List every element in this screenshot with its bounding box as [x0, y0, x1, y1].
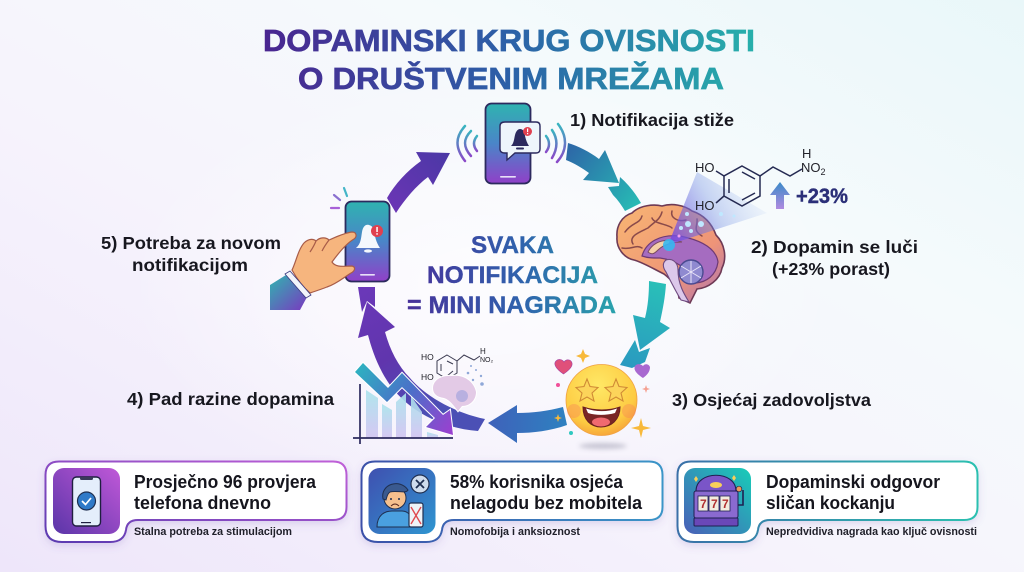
hand — [292, 232, 356, 293]
icon: bell — [356, 225, 380, 248]
icon tile: slot machine: 7 — [711, 497, 718, 511]
dopamine molecule with increase: HO — [695, 198, 714, 213]
top phone with notification — [458, 104, 565, 184]
cerebrum — [617, 205, 725, 303]
dopamine burst beam — [663, 172, 767, 251]
dopamine molecule with increase: HO — [695, 160, 714, 175]
dopamine molecule with increase: NO — [801, 160, 820, 175]
center message — [407, 232, 616, 319]
brainstem — [663, 259, 689, 302]
icon tile: slot machine — [684, 468, 751, 534]
step 4 label: 4) Pad razine dopamina — [127, 389, 334, 409]
card headline: Prosječno 96 provjera — [134, 472, 317, 492]
corpus callosum — [648, 240, 682, 254]
step 5 label: notifikacijom — [132, 255, 248, 275]
emoji face — [566, 364, 637, 436]
icon tile: slot machine: 7 — [700, 497, 707, 511]
small molecule and faded brain: HO — [421, 352, 434, 362]
card note: Stalna potreba za stimulacijom — [134, 526, 292, 538]
card: nomophobia — [362, 462, 662, 542]
smile — [583, 407, 620, 427]
arrow: dopamine drop to new need — [358, 287, 485, 431]
title: DOPAMINSKI KRUG OVISNOSTI — [263, 23, 755, 58]
brain illustration — [617, 205, 725, 303]
step 1 label: 1) Notifikacija stiže — [570, 110, 734, 130]
icon: up arrow — [770, 182, 790, 209]
axes — [353, 384, 453, 444]
icon tile: worried person — [368, 468, 436, 534]
star eyes — [576, 379, 598, 401]
sparkles — [554, 349, 651, 438]
card note: Nomofobija i anksioznost — [450, 526, 580, 538]
emoji shadow — [579, 443, 627, 449]
icon: notification bubble — [500, 122, 540, 160]
cerebellum — [679, 260, 703, 284]
card headline: Dopaminski odgovor — [766, 472, 940, 492]
phone body — [346, 202, 390, 282]
card: gambling response — [678, 462, 978, 542]
arrow: brain to emoji — [620, 281, 670, 368]
small molecule and faded brain: NO₂ — [480, 357, 494, 364]
step 2 label: (+23% porast) — [772, 259, 890, 279]
falling arrow — [355, 363, 453, 435]
small molecule and faded brain: H — [480, 347, 486, 356]
step 5 label: 5) Potreba za novom — [101, 233, 281, 253]
card: phone checks — [46, 462, 346, 542]
step 2 label: 2) Dopamin se luči — [751, 237, 918, 257]
card: nomophobia: nelagodu bez mobitela — [450, 493, 643, 513]
card note: Nepredvidiva nagrada kao ključ ovisnosti — [766, 526, 977, 538]
folds — [622, 211, 702, 248]
card frame — [46, 462, 346, 542]
dopamine molecule with increase — [695, 146, 848, 213]
left phone with tapping hand — [270, 188, 390, 310]
icon: signal waves left — [458, 126, 477, 161]
bars — [366, 390, 438, 438]
card frame — [678, 462, 978, 542]
icon: signal waves right — [546, 124, 565, 162]
falling chart — [353, 363, 453, 444]
center message: = MINI NAGRADA — [407, 292, 616, 319]
card: phone checks: telefona dnevno — [134, 493, 271, 513]
card frame — [362, 462, 662, 542]
sleeve — [270, 275, 307, 310]
arrow: left phone to top phone — [387, 152, 450, 213]
step 3 label: 3) Osjećaj zadovoljstva — [672, 390, 871, 410]
inner brain — [642, 236, 718, 283]
small molecule and faded brain — [421, 347, 494, 411]
molecule — [716, 166, 802, 206]
emoji with star eyes — [554, 349, 651, 449]
card: gambling response: sličan kockanju — [766, 493, 895, 513]
step 2 label — [751, 237, 918, 279]
small molecule and faded brain: HO — [421, 372, 434, 382]
hearts — [555, 359, 572, 374]
title — [263, 23, 755, 96]
phone body — [486, 104, 530, 184]
icon tile: slot machine: 7 — [722, 497, 729, 511]
center message: SVAKA — [471, 232, 554, 259]
arrow: notification to brain — [566, 143, 641, 211]
tap accents — [331, 188, 347, 208]
icon tile: phone check — [53, 468, 120, 534]
dopamine molecule with increase: 2 — [820, 167, 826, 177]
dopamine molecule with increase: H — [802, 146, 811, 161]
card headline: 58% korisnika osjeća — [450, 472, 624, 492]
title: O DRUŠTVENIM MREŽAMA — [298, 60, 724, 96]
arrow: emoji to dopamine drop — [488, 405, 567, 443]
step 5 label — [101, 233, 281, 275]
center message: NOTIFIKACIJA — [427, 262, 598, 289]
increase value: +23% — [796, 185, 848, 208]
